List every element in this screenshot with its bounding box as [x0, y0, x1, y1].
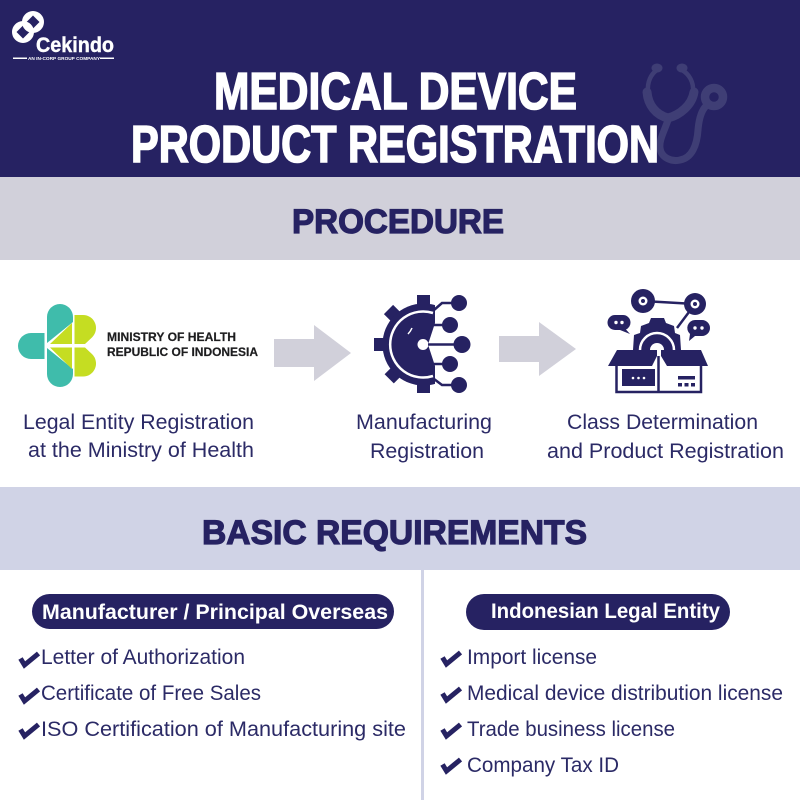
item: certificate of free sales: Certificate of Free Sales [41, 682, 261, 705]
panel: procedure heading band [0, 177, 800, 260]
item: medical device distribution license: Medical device distribution license [467, 682, 783, 705]
title: MEDICAL DEVICE [214, 63, 577, 121]
arrow: step two to three [499, 322, 576, 376]
item: trade business license: Trade business license [467, 718, 675, 741]
logo: Cekindo: Cekindo [36, 34, 114, 57]
logo: Ministry of Health [18, 304, 258, 387]
icon: stethoscope watermark [647, 64, 723, 160]
divider between requirement columns [421, 570, 424, 800]
item: ISO certification: ISO Certification of Manufacturing site [41, 718, 406, 741]
text: class determination and product registration: and Product Registration [547, 440, 784, 463]
text: manufacturing registration [356, 411, 492, 463]
header banner [0, 0, 800, 177]
item: letter of authorization: Letter of Authorization [41, 646, 245, 669]
pill heading: indonesian legal entity [466, 594, 730, 630]
text: legal entity registration: Legal Entity Registration [23, 411, 254, 434]
panel: basic requirements heading band [0, 487, 800, 570]
logo: Cekindo: AN IN-CORP GROUP COMPANY [28, 56, 100, 61]
text: legal entity registration: at the Ministry of Health [28, 439, 254, 462]
item: company tax id: Company Tax ID [467, 754, 619, 777]
text: class determination and product registration: Class Determination [567, 411, 758, 434]
pill heading: indonesian legal entity: Indonesian Legal Entity [491, 600, 720, 623]
title: PRODUCT REGISTRATION [131, 116, 659, 174]
list: manufacturer requirements [20, 646, 406, 741]
pill heading: manufacturer: Manufacturer / Principal Overseas [42, 601, 388, 624]
list: legal entity requirements [442, 646, 783, 777]
icon: gear with nodes [374, 295, 472, 393]
logo: Ministry of Health: MINISTRY OF HEALTH [107, 332, 236, 344]
text: manufacturing registration: Registration [370, 440, 484, 463]
panel: indonesian legal entity [442, 594, 783, 777]
panel: manufacturer / principal overseas [20, 594, 406, 741]
logo: Cekindo [12, 11, 114, 61]
logo: Ministry of Health: REPUBLIC OF INDONESIA [107, 347, 258, 359]
text: legal entity registration [23, 411, 254, 462]
title [131, 63, 659, 174]
text: class determination and product registration [547, 411, 784, 463]
icon: box with gear and chat bubbles [608, 289, 710, 392]
text: manufacturing registration: Manufacturing [356, 411, 492, 434]
panel: basic requirements heading band: BASIC REQUIREMENTS [202, 514, 587, 552]
arrow: step one to two [274, 325, 351, 381]
panel: procedure steps [18, 289, 784, 463]
panel: procedure heading band: PROCEDURE [292, 203, 504, 241]
pill heading: manufacturer [32, 594, 394, 629]
item: import license: Import license [467, 646, 597, 669]
